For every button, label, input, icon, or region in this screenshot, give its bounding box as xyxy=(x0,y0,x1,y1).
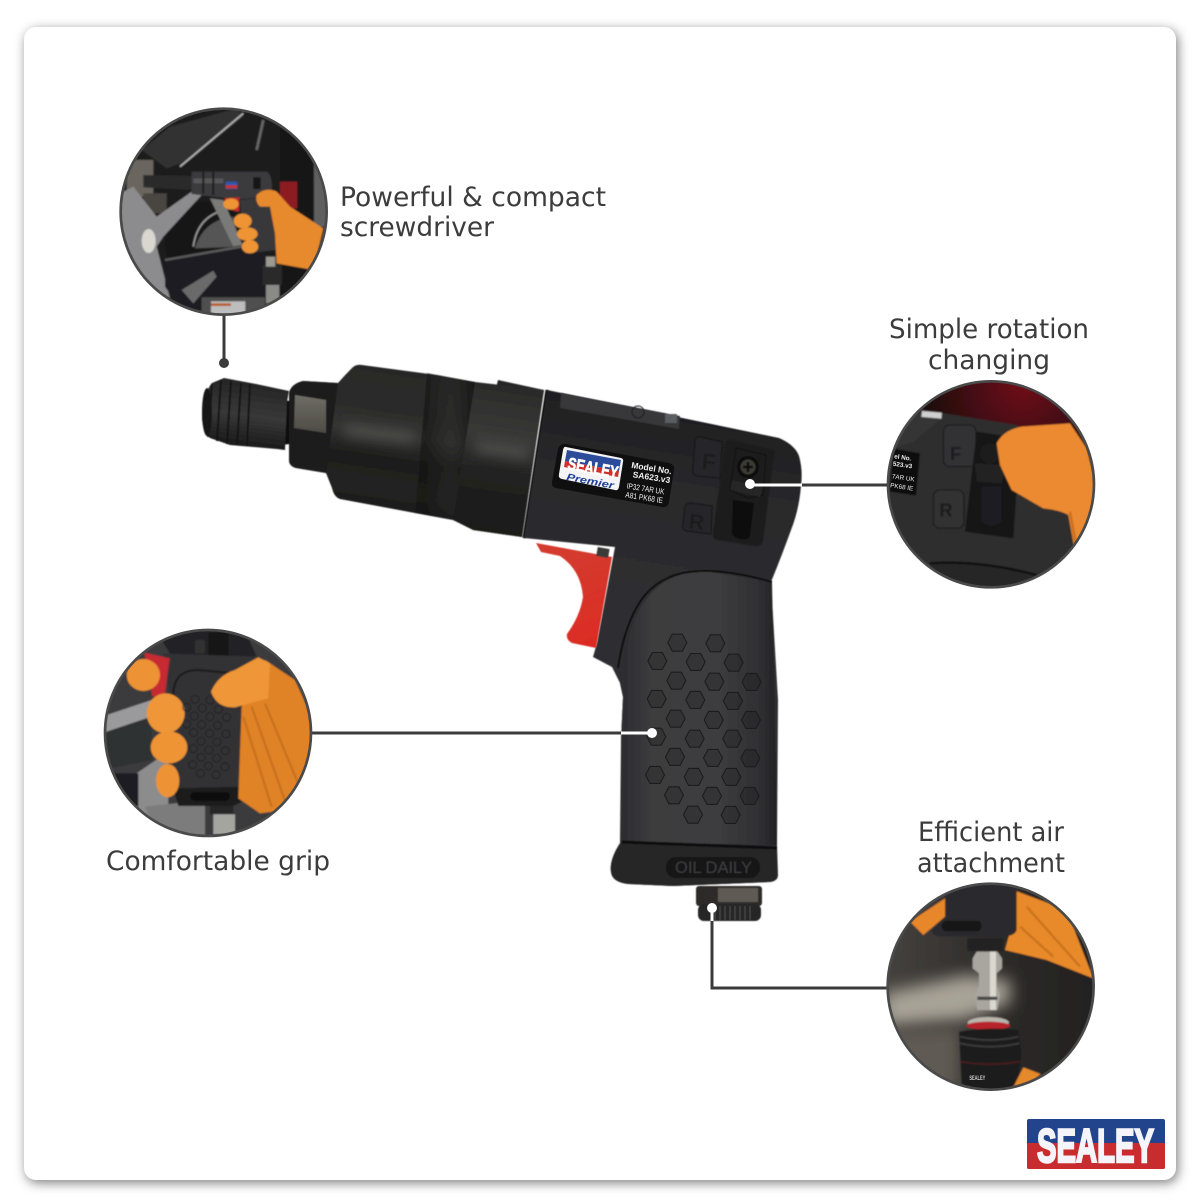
heading: powerful and compact screwdriver xyxy=(340,182,606,243)
photo circle: forward and reverse selector: F xyxy=(950,443,961,464)
heading: powerful and compact screwdriver: screwdriver xyxy=(340,212,495,243)
heading: comfortable grip: Comfortable grip xyxy=(106,846,330,877)
rating label xyxy=(552,444,674,507)
trigger xyxy=(536,543,612,648)
text: cropped label in photo: PK68 IE xyxy=(890,482,914,493)
sealey logo on label: SEALEY xyxy=(566,454,620,482)
illustration: air screwdriver xyxy=(202,365,802,921)
connector line: chuck to top photo xyxy=(219,315,229,368)
photo circle: gloved hand on grip xyxy=(104,628,312,838)
hex collar and barrel xyxy=(289,365,547,538)
photo circle: air fitting attachment xyxy=(886,882,1095,1091)
rating label: A81 PK68 IE xyxy=(625,490,664,505)
sealey logo on label xyxy=(559,447,623,492)
connector line: grip to left photo xyxy=(312,728,657,738)
grip hexagon pattern xyxy=(645,634,761,823)
rear housing and grip body xyxy=(524,390,802,886)
rotation selector: R xyxy=(688,510,705,535)
text: oil daily: OIL DAILY xyxy=(675,858,752,877)
text: cropped label in photo: 523.v3 xyxy=(892,461,913,470)
heading: efficient air attachment xyxy=(917,817,1065,879)
rating label: IP32 7AR UK xyxy=(626,481,666,496)
text: brand on coupler: SEALEY xyxy=(969,1075,986,1082)
rating label: SA623.v3 xyxy=(632,469,671,485)
photo circle: screwdriver in use on motorbike xyxy=(119,107,328,316)
text: cropped label in photo: el No. xyxy=(894,453,912,463)
text: cropped label in photo: 7AR UK xyxy=(891,473,916,484)
photo circle: forward and reverse selector xyxy=(886,380,1096,589)
infographic canvas xyxy=(104,107,1165,1169)
connector line: selector to right photo xyxy=(745,479,888,489)
heading: simple rotation changing: changing xyxy=(928,345,1050,376)
connector line: air inlet to bottom photo xyxy=(707,903,887,988)
heading: efficient air attachment: Efficient air xyxy=(918,817,1065,848)
rating label: Model No. xyxy=(631,460,672,476)
heading: simple rotation changing xyxy=(889,314,1089,376)
sealey logo on label: Premier xyxy=(565,472,616,492)
heading: efficient air attachment: attachment xyxy=(917,848,1065,879)
heading: simple rotation changing: Simple rotation xyxy=(889,314,1089,345)
text: cropped label in photo xyxy=(890,454,914,490)
photo circle: forward and reverse selector: R xyxy=(939,500,953,521)
rotation selector xyxy=(683,437,774,546)
top plate on housing xyxy=(560,393,680,429)
chuck xyxy=(202,378,298,450)
rotation selector: F xyxy=(701,449,717,475)
heading: powerful and compact screwdriver: Powerful & compact xyxy=(340,182,606,213)
air fitting xyxy=(696,886,762,921)
